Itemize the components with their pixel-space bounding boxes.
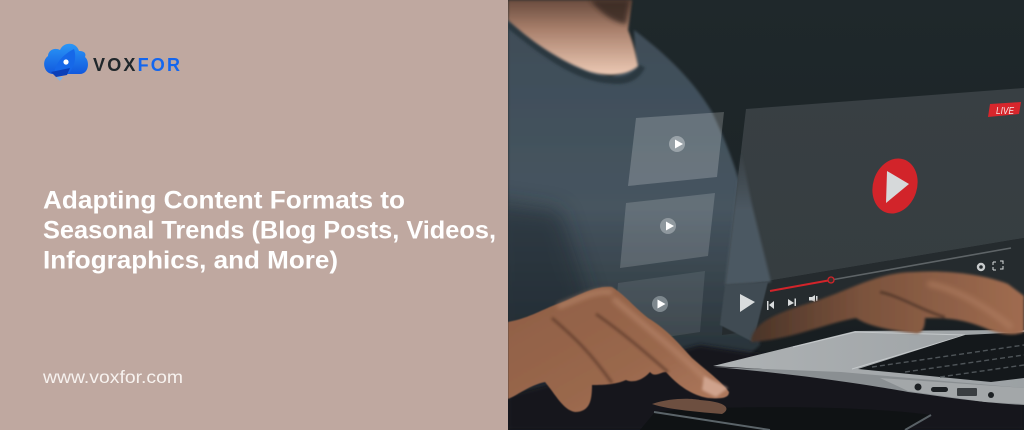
person neck (508, 0, 638, 75)
title: Infographics, and More) (43, 246, 338, 274)
shirt seen through panel (725, 166, 772, 285)
fingernail highlight (702, 376, 728, 397)
finger reflection (652, 399, 727, 414)
shirt collar (508, 24, 642, 80)
hand silhouette (508, 287, 729, 412)
left hand (508, 287, 729, 412)
thumbnail 2 (620, 193, 715, 268)
title: Adapting Content Formats to (43, 186, 405, 214)
right hand (751, 272, 1024, 342)
thumbnail 3 (618, 271, 705, 336)
icon: cloud with rocket (44, 44, 88, 81)
right hand finger highlight (930, 284, 1010, 326)
icon: play (740, 294, 755, 312)
icon: settings gear (978, 264, 984, 270)
logo (44, 44, 180, 81)
laptop body (713, 330, 1024, 392)
icon: thumbnail play (660, 218, 676, 234)
icon: previous (767, 301, 774, 310)
icon: thumbnail play (669, 136, 685, 152)
title: Seasonal Trends (Blog Posts, Videos, (43, 216, 496, 244)
keyboard (858, 332, 1024, 382)
photo background (508, 0, 1024, 430)
neck shadow (590, 0, 630, 24)
title (43, 186, 496, 274)
finger creases (552, 314, 668, 383)
live badge (988, 102, 1021, 117)
knuckle highlights (560, 292, 705, 378)
touchpad edge (793, 332, 965, 369)
laptop front edge (713, 367, 1024, 405)
icon: next (788, 298, 796, 306)
player controls (740, 261, 1003, 312)
desk shadow (509, 343, 756, 400)
logo wordmark: VOXFOR (93, 55, 180, 75)
person shirt (490, 18, 760, 400)
icon: volume (809, 295, 818, 302)
shirt shadow at left (508, 198, 586, 321)
video player panel (720, 88, 1024, 342)
left panel background (0, 0, 508, 430)
icon: fullscreen (993, 261, 1003, 270)
icon: thumbnail play (652, 296, 668, 312)
icon: big red play button (872, 158, 918, 214)
live badge: LIVE (996, 106, 1014, 117)
right hand finger gap (880, 292, 945, 317)
laptop ports (914, 384, 994, 398)
laptop (713, 330, 1024, 405)
thumbnail 1 (628, 112, 724, 186)
phone on desk (640, 399, 931, 430)
progress bar (770, 248, 1011, 291)
photo panel (490, 0, 1024, 430)
website url: www.voxfor.com (42, 367, 183, 387)
